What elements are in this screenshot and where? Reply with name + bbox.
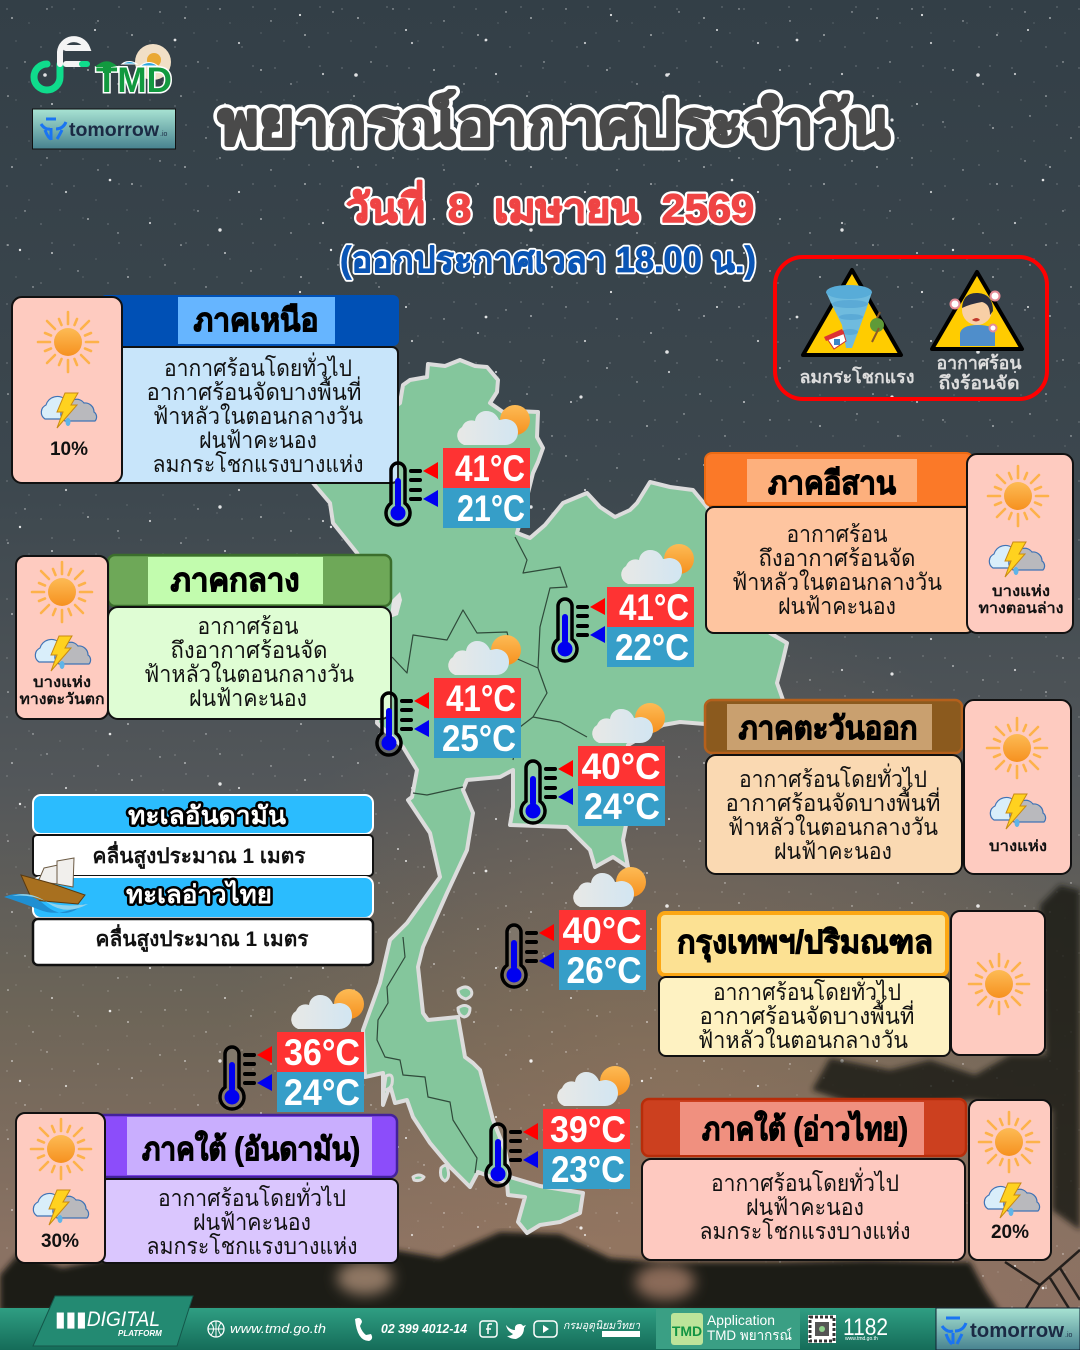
body text: ฝนฟ้าคะนอง [199,427,317,453]
panel: bangkok [659,911,1045,1056]
header: ภาคใต้ (อ่าวไทย) [702,1110,908,1147]
logo: TMD: TMD [96,61,172,100]
header: ภาคเหนือ [194,302,318,338]
body text [706,507,974,633]
date: วันที่ 8 เมษายน 2569 [346,180,754,231]
body text: อากาศร้อนจัดบางพื้นที่ [726,787,940,816]
body text: ฝนฟ้าคะนอง [193,1209,311,1235]
body text: ฟ้าหลัวในตอนกลางวัน [728,814,938,840]
temperature: central [377,635,521,759]
body text: ลมกระโชกแรงบางแห่ง [146,1233,358,1259]
body text: ฝนฟ้าคะนอง [778,593,896,619]
body text: อากาศร้อนโดยทั่วไป [713,976,901,1005]
header: ภาคใต้ (อันดามัน) [142,1130,360,1167]
andaman wave text: คลื่นสูงประมาณ 1 เมตร [92,840,306,870]
application tile [656,1309,800,1349]
panel: east [705,700,1071,874]
body text: อากาศร้อนโดยทั่วไป [739,763,927,792]
title: พยากรณ์อากาศประจำวัน [218,90,890,157]
body text: ถึงอากาศร้อนจัด [170,637,328,663]
panel: south andaman [16,1113,398,1263]
header: ภาคอีสาน [768,465,896,501]
issued time: (ออกประกาศเวลา 18.00 น.) [340,239,756,280]
sky card: 10% [50,439,88,460]
date: วันที่ 8 เมษายน 2569 [346,180,754,231]
sky card: ทางตอนล่าง [978,600,1064,617]
body text: ลมกระโชกแรงบางแห่ง [152,451,364,477]
label: extreme heat: ถึงร้อนจัด [938,373,1020,393]
temperature: east: 40°C [582,746,660,787]
body text: อากาศร้อนโดยทั่วไป [158,1182,346,1211]
temperature: bangkok: 40°C [562,910,642,951]
application tile: TMD พยากรณ์ [707,1327,792,1343]
header [705,700,962,753]
temperature: northeast: 22°C [615,627,689,668]
label: gale: ลมกระโชกแรง [800,366,914,387]
sky card [951,911,1045,1055]
header: ภาคตะวันออก [738,710,918,746]
sky card [967,454,1073,633]
digital platform tab: PLATFORM [118,1329,162,1338]
body text: อากาศร้อน [198,613,299,639]
temperature: south gulf [486,1066,630,1190]
department online label: กรมอุตุนิยมวิทยา [563,1320,641,1332]
temperature: south gulf: 39°C [550,1109,626,1150]
issued time: (ออกประกาศเวลา 18.00 น.) [340,239,756,280]
sky card: ทางตะวันตก [20,691,104,708]
panel: central [16,555,391,719]
header [705,453,973,506]
temperature: northeast: 41°C [619,587,689,628]
body text: ฝนฟ้าคะนอง [189,685,307,711]
temperature: south andaman: 36°C [284,1032,360,1073]
panel: sea conditions [4,795,373,965]
logo: TMD [95,44,172,100]
temperature: east [521,703,665,827]
body text: อากาศร้อนจัดบางพื้นที่ [146,376,362,405]
sky card [16,1113,105,1263]
temperature: south andaman [220,989,364,1113]
body text: อากาศร้อนโดยทั่วไป [711,1167,899,1196]
header [659,913,947,975]
logo: de [34,39,87,90]
header [100,295,399,346]
temperature: north [386,405,530,529]
gulf wave text [33,919,373,965]
logo: tomorrow.io [32,109,176,149]
gulf wave text: คลื่นสูงประมาณ 1 เมตร [96,923,309,953]
icon: gale warning triangle [803,270,901,355]
body text: ฟ้าหลัวในตอนกลางวัน [144,661,354,687]
body text: อากาศร้อนโดยทั่วไป [164,352,352,381]
body text: อากาศร้อนจัดบางพื้นที่ [700,1000,914,1029]
sky card: บางแห่ง [33,674,91,691]
header [108,555,391,606]
andaman sea header [33,795,373,834]
tomorrow.io footer box: .io [1065,1332,1072,1339]
body text: ฟ้าหลัวในตอนกลางวัน [732,569,942,595]
andaman sea header: ทะเลอันดามัน [128,802,286,830]
social icons [480,1321,557,1339]
body text: ถึงอากาศร้อนจัด [758,545,916,571]
department online label [563,1320,641,1337]
body text: ฟ้าหลัวในตอนกลางวัน [153,403,363,429]
panel: north [12,295,399,483]
header [90,1115,397,1177]
sky card [16,556,108,719]
digital platform tab [33,1296,193,1346]
sky card: บางแห่ง [989,838,1047,855]
website [208,1321,326,1337]
digital platform tab: ▮▮▮DIGITAL [55,1308,160,1331]
icon: qr code [808,1315,836,1343]
phone [355,1318,468,1341]
panel: south gulf [642,1099,1051,1260]
gulf sea header: ทะเลอ่าวไทย [126,879,272,909]
tree silhouettes [0,885,1080,1312]
temperature: northeast [553,544,694,668]
body text: ฝนฟ้าคะนอง [774,838,892,864]
tomorrow.io footer box: tomorrow [970,1320,1064,1342]
sky card: 20% [991,1222,1029,1243]
sky card: 30% [41,1231,79,1252]
temperature: central: 25°C [442,718,516,759]
body text: ฝนฟ้าคะนอง [746,1194,864,1220]
panel: northeast [705,453,1073,633]
temperature: south andaman: 24°C [284,1072,360,1113]
tomorrow.io footer box [936,1308,1080,1350]
temperature: bangkok [502,867,646,991]
temperature: north: 21°C [457,488,525,529]
header: ภาคกลาง [170,562,300,598]
title: พยากรณ์อากาศประจำวัน [218,90,890,157]
sky card: บางแห่ง [992,583,1050,600]
warning box [775,257,1047,399]
logos [32,39,176,149]
gulf sea header [33,877,373,918]
label: extreme heat [936,353,1022,393]
logo: tomorrow.io: .io [160,131,168,138]
hotline: 1182 [843,1314,888,1341]
logo: tomorrow.io: tomorrow [69,120,159,141]
body text [642,1159,965,1260]
label: extreme heat: อากาศร้อน [936,353,1022,373]
temperature: bangkok: 26°C [566,950,642,991]
sky card [969,1100,1051,1260]
body text: ลมกระโชกแรงบางแห่ง [700,1218,910,1244]
sky card [12,297,122,483]
website: www.tmd.go.th [230,1321,326,1336]
header: กรุงเทพฯ/ปริมณฑล [677,924,933,963]
body text [659,976,950,1056]
application tile: TMD [672,1323,702,1339]
application tile: Application [707,1312,775,1328]
footer bar [0,1296,1080,1350]
body text [706,755,962,874]
thailand map [313,360,787,1233]
body text [100,347,398,483]
icon: extreme heat warning triangle [932,272,1022,349]
temperature: north: 41°C [455,448,525,489]
body text [108,607,391,719]
temperature: central: 41°C [446,678,516,719]
hotline: www.tmd.go.th [845,1336,878,1342]
body text: อากาศร้อน [786,521,888,547]
andaman wave text [33,835,373,876]
sky card [964,700,1071,874]
temperature: south gulf: 23°C [551,1149,625,1190]
header [642,1099,966,1156]
phone: 02 399 4012-14 [381,1321,468,1336]
body text: ฟ้าหลัวในตอนกลางวัน [698,1027,908,1053]
temperature: east: 24°C [584,786,660,827]
icon: ship [4,858,88,913]
body text [100,1179,398,1263]
